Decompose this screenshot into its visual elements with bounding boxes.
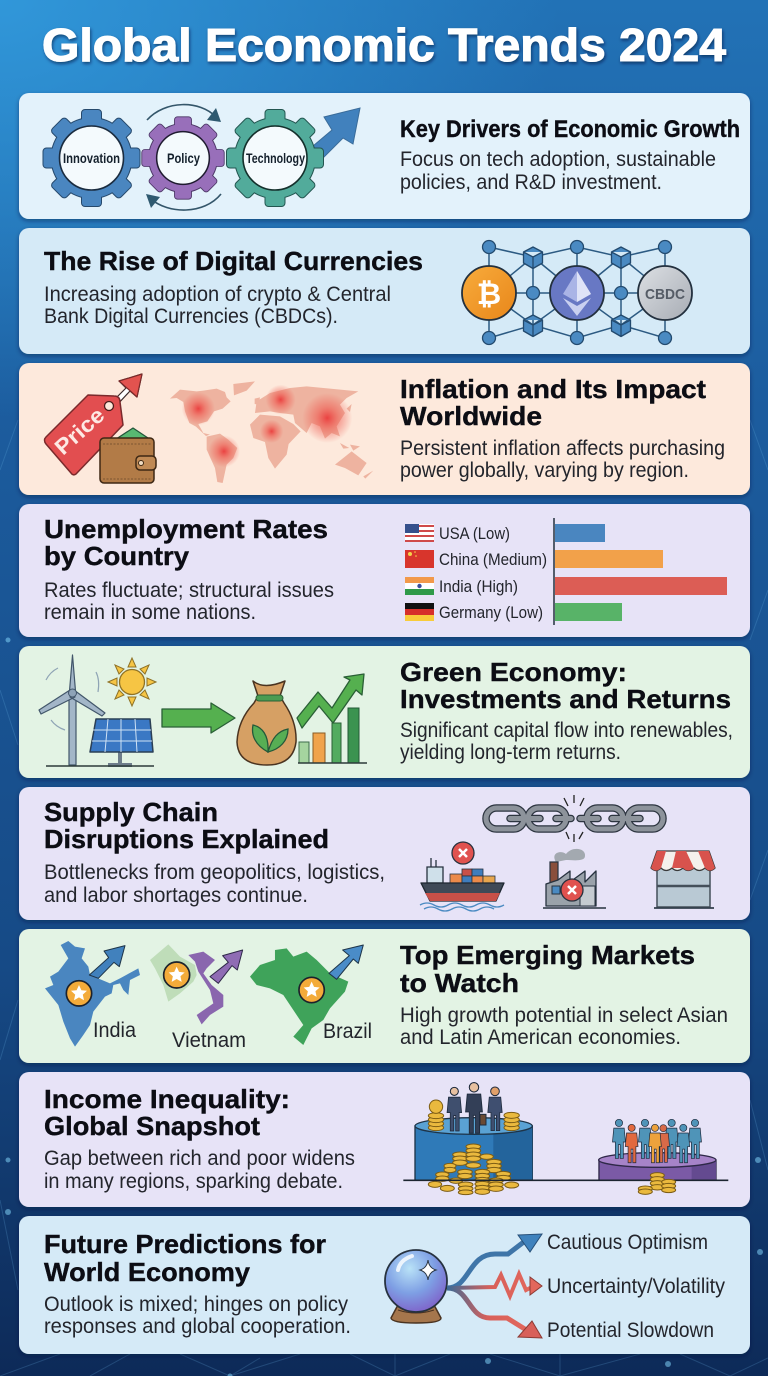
heading: Investments and Returns [400,684,731,714]
text block: and Latin American economies. [400,1026,681,1049]
text block: power globally, varying by region. [400,459,689,482]
label: slowdown: Potential Slowdown [547,1319,714,1342]
title: Global Economic Trends 2024 [42,19,726,71]
icon: Vietnam map: Vietnam [172,1029,246,1052]
panel: unemployment [19,504,750,637]
heading: Global Snapshot [44,1111,260,1141]
text block: Significant capital flow into renewables, [400,719,733,742]
heading [44,1229,326,1287]
text block [400,719,733,764]
text block [400,148,716,194]
icon: gears and growth arrow [44,105,360,210]
icon: crystal ball [385,1250,447,1323]
icon: storefront [651,851,715,908]
text block: High growth potential in select Asian [400,1004,728,1027]
flag: China [405,550,434,568]
heading: Income Inequality: [44,1084,290,1114]
icon: Vietnam map [150,944,246,1052]
text block: Persistent inflation affects purchasing [400,437,725,460]
text block: and labor shortages continue. [44,884,308,907]
heading: by Country [44,541,190,571]
heading: to Watch [400,968,519,998]
icon: renewable energy [39,655,156,766]
panel: green economy [19,646,750,778]
arrow: cautious optimism [447,1241,525,1288]
icon: world inflation map [170,381,373,483]
icon: India map [45,941,140,1047]
icon: Brazil map: Brazil [323,1020,372,1043]
icon: gears and growth arrow: Innovation [63,150,120,166]
text block: Gap between rich and poor widens [44,1147,355,1170]
icon: coin pile [428,1144,519,1195]
heading [400,657,731,714]
panel: supply chain [19,787,750,920]
heading: Unemployment Rates [44,514,328,544]
icon: small coin stack [638,1173,676,1194]
icon: poor podium with people [599,1119,716,1180]
heading: Supply Chain [44,797,218,827]
text block: yielding long-term returns. [400,741,621,764]
arrowhead: cautious optimism [518,1234,542,1252]
icon: wealth podiums [403,1083,728,1195]
heading [44,797,329,854]
panel: income inequality [19,1072,750,1207]
panel: key drivers [19,93,750,219]
heading: Inflation and Its Impact [400,374,706,404]
text block [400,1004,728,1049]
arrowhead: potential slowdown [518,1321,542,1338]
text block: Outlook is mixed; hinges on policy [44,1293,348,1316]
panel: inflation [19,363,750,495]
heading [400,374,706,431]
icon: Brazil map [250,945,372,1045]
bar chart: unemployment by country: Germany (Low) [439,604,543,622]
arrowhead: uncertainty [530,1277,542,1295]
text block: Focus on tech adoption, sustainable [400,148,716,171]
icon: price tag with arrow and wallet [44,374,156,483]
icon: money bag and growth chart [237,674,367,765]
text block [44,283,391,328]
text block: remain in some nations. [44,601,256,624]
icon: broken chain [486,795,663,842]
bar chart: unemployment by country [405,518,727,625]
text block: responses and global cooperation. [44,1315,351,1338]
text block [44,1147,355,1193]
icon: price tag with arrow and wallet: Price [50,402,109,460]
icon: India map: India [93,1019,136,1042]
icon: gears and growth arrow: Technology [246,150,305,166]
icon: blockchain network with coins: ₿ [477,277,501,312]
icon: cargo ship [420,842,504,911]
icon: wealthy podium with coins [415,1083,532,1180]
bar chart: unemployment by country: India (High) [439,578,518,596]
text block: in many regions, sparking debate. [44,1170,343,1193]
arrow: potential slowdown [447,1288,528,1331]
icon: gears and growth arrow: Policy [167,150,200,166]
flag: India [405,577,434,595]
heading: Future Predictions for [44,1229,326,1259]
text block [44,1293,351,1338]
icon: blockchain network with coins: CBDC [645,286,685,303]
panel: future predictions [19,1216,750,1354]
heading: Key Drivers of Economic Growth [400,116,740,143]
text block: Rates fluctuate; structural issues [44,579,334,602]
text block: policies, and R&D investment. [400,171,662,194]
heading [44,1084,290,1141]
flag: Germany [405,603,434,621]
heading [400,940,695,998]
text block [44,861,385,907]
panel: emerging markets [19,929,750,1063]
bar chart: unemployment by country: China (Medium) [439,551,547,569]
text block [400,437,725,482]
heading: Worldwide [400,401,542,431]
icon: blockchain network with coins [462,240,692,344]
arrow: uncertainty [447,1274,534,1296]
label: cautious optimism: Cautious Optimism [547,1231,708,1254]
label: uncertainty: Uncertainty/Volatility [547,1275,725,1298]
heading: Green Economy: [400,657,627,687]
text block: Bottlenecks from geopolitics, logistics, [44,861,385,884]
bar chart: unemployment by country: USA (Low) [439,525,510,543]
text block: Bank Digital Currencies (CBDCs). [44,305,338,328]
flag: USA [405,524,434,542]
heading [44,514,328,571]
panel: digital currencies [19,228,750,354]
heading: Top Emerging Markets [400,940,695,970]
icon: factory [543,849,606,908]
text block [44,579,334,624]
heading: The Rise of Digital Currencies [44,246,423,276]
heading: Disruptions Explained [44,824,329,854]
arrow [162,703,235,733]
text block: Increasing adoption of crypto & Central [44,283,391,306]
heading: World Economy [44,1257,251,1287]
